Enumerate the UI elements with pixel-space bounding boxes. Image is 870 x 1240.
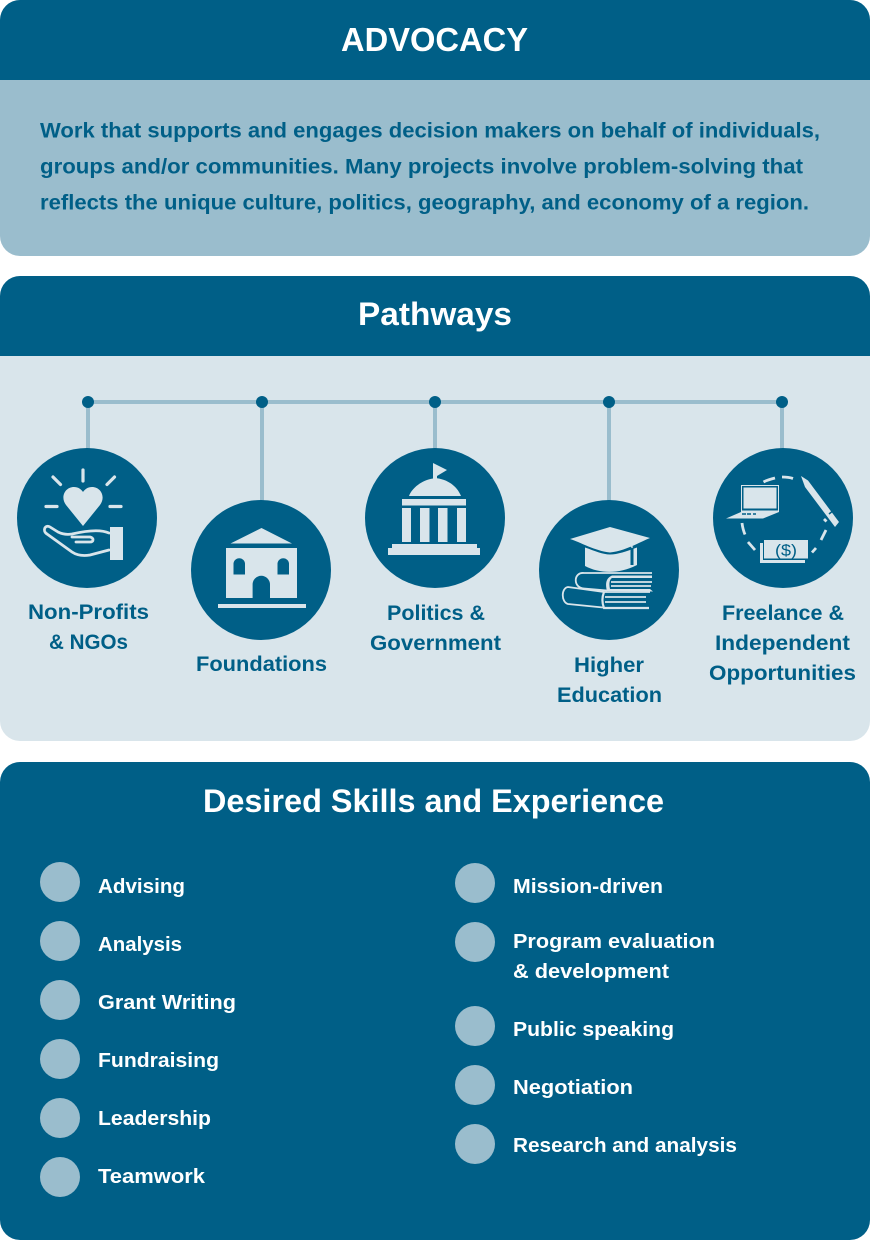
panel: advocacy	[0, 0, 870, 256]
panel: desired skills and experience	[0, 762, 870, 1240]
heading: pathways: Pathways	[358, 296, 512, 332]
text block: advocacy description	[40, 120, 820, 214]
skills bullets	[40, 862, 495, 1197]
panel: pathways	[0, 276, 870, 741]
connector lines	[82, 396, 788, 502]
pathway: politics and government	[365, 448, 505, 588]
skills list: & development	[513, 960, 669, 983]
text block: advocacy description: groups and/or communities. Many projects involve problem-solving that	[40, 156, 803, 178]
pathway labels: Foundations	[196, 653, 327, 676]
icon: capitol	[388, 463, 480, 555]
pathway labels: Politics &	[387, 602, 485, 625]
skills list: Program evaluation	[513, 930, 715, 953]
icon: laptop, pencil, money cycle: ($)	[775, 542, 797, 560]
icon: heart in hand	[44, 470, 123, 560]
pathway: non-profits	[17, 448, 157, 588]
skills list: Grant Writing	[98, 991, 236, 1014]
pathway labels: Opportunities	[709, 662, 856, 685]
pathway labels	[28, 601, 856, 707]
icon: building	[218, 528, 306, 608]
text block: advocacy description: Work that supports and engages decision makers on behalf of individuals,	[40, 120, 820, 142]
text block: advocacy description: reflects the unique culture, politics, geography, and economy of a region.	[40, 192, 809, 214]
skills list	[98, 875, 737, 1188]
pathway labels: Non-Profits	[28, 601, 149, 624]
pathway: higher education	[539, 500, 679, 640]
pathway labels: Independent	[715, 632, 850, 655]
skills list: Teamwork	[98, 1165, 206, 1188]
skills list: Fundraising	[98, 1049, 219, 1072]
pathway labels: Education	[557, 684, 662, 707]
icon: cap and books	[563, 527, 653, 608]
pathway: freelance	[713, 448, 853, 588]
skills list: Advising	[98, 875, 185, 898]
skills list: Research and analysis	[513, 1134, 737, 1157]
pathway labels: Freelance &	[722, 602, 844, 625]
skills list: Negotiation	[513, 1076, 633, 1099]
skills list: Mission-driven	[513, 875, 663, 898]
heading: desired skills: Desired Skills and Experience	[203, 783, 664, 819]
heading: advocacy: ADVOCACY	[341, 22, 528, 59]
pathway labels: Higher	[574, 654, 644, 677]
pathway labels: & NGOs	[49, 631, 128, 654]
skills list: Leadership	[98, 1107, 211, 1130]
skills list: Public speaking	[513, 1018, 674, 1041]
skills list: Analysis	[98, 933, 182, 956]
pathway: foundations	[191, 500, 331, 640]
pathway labels: Government	[370, 632, 501, 655]
